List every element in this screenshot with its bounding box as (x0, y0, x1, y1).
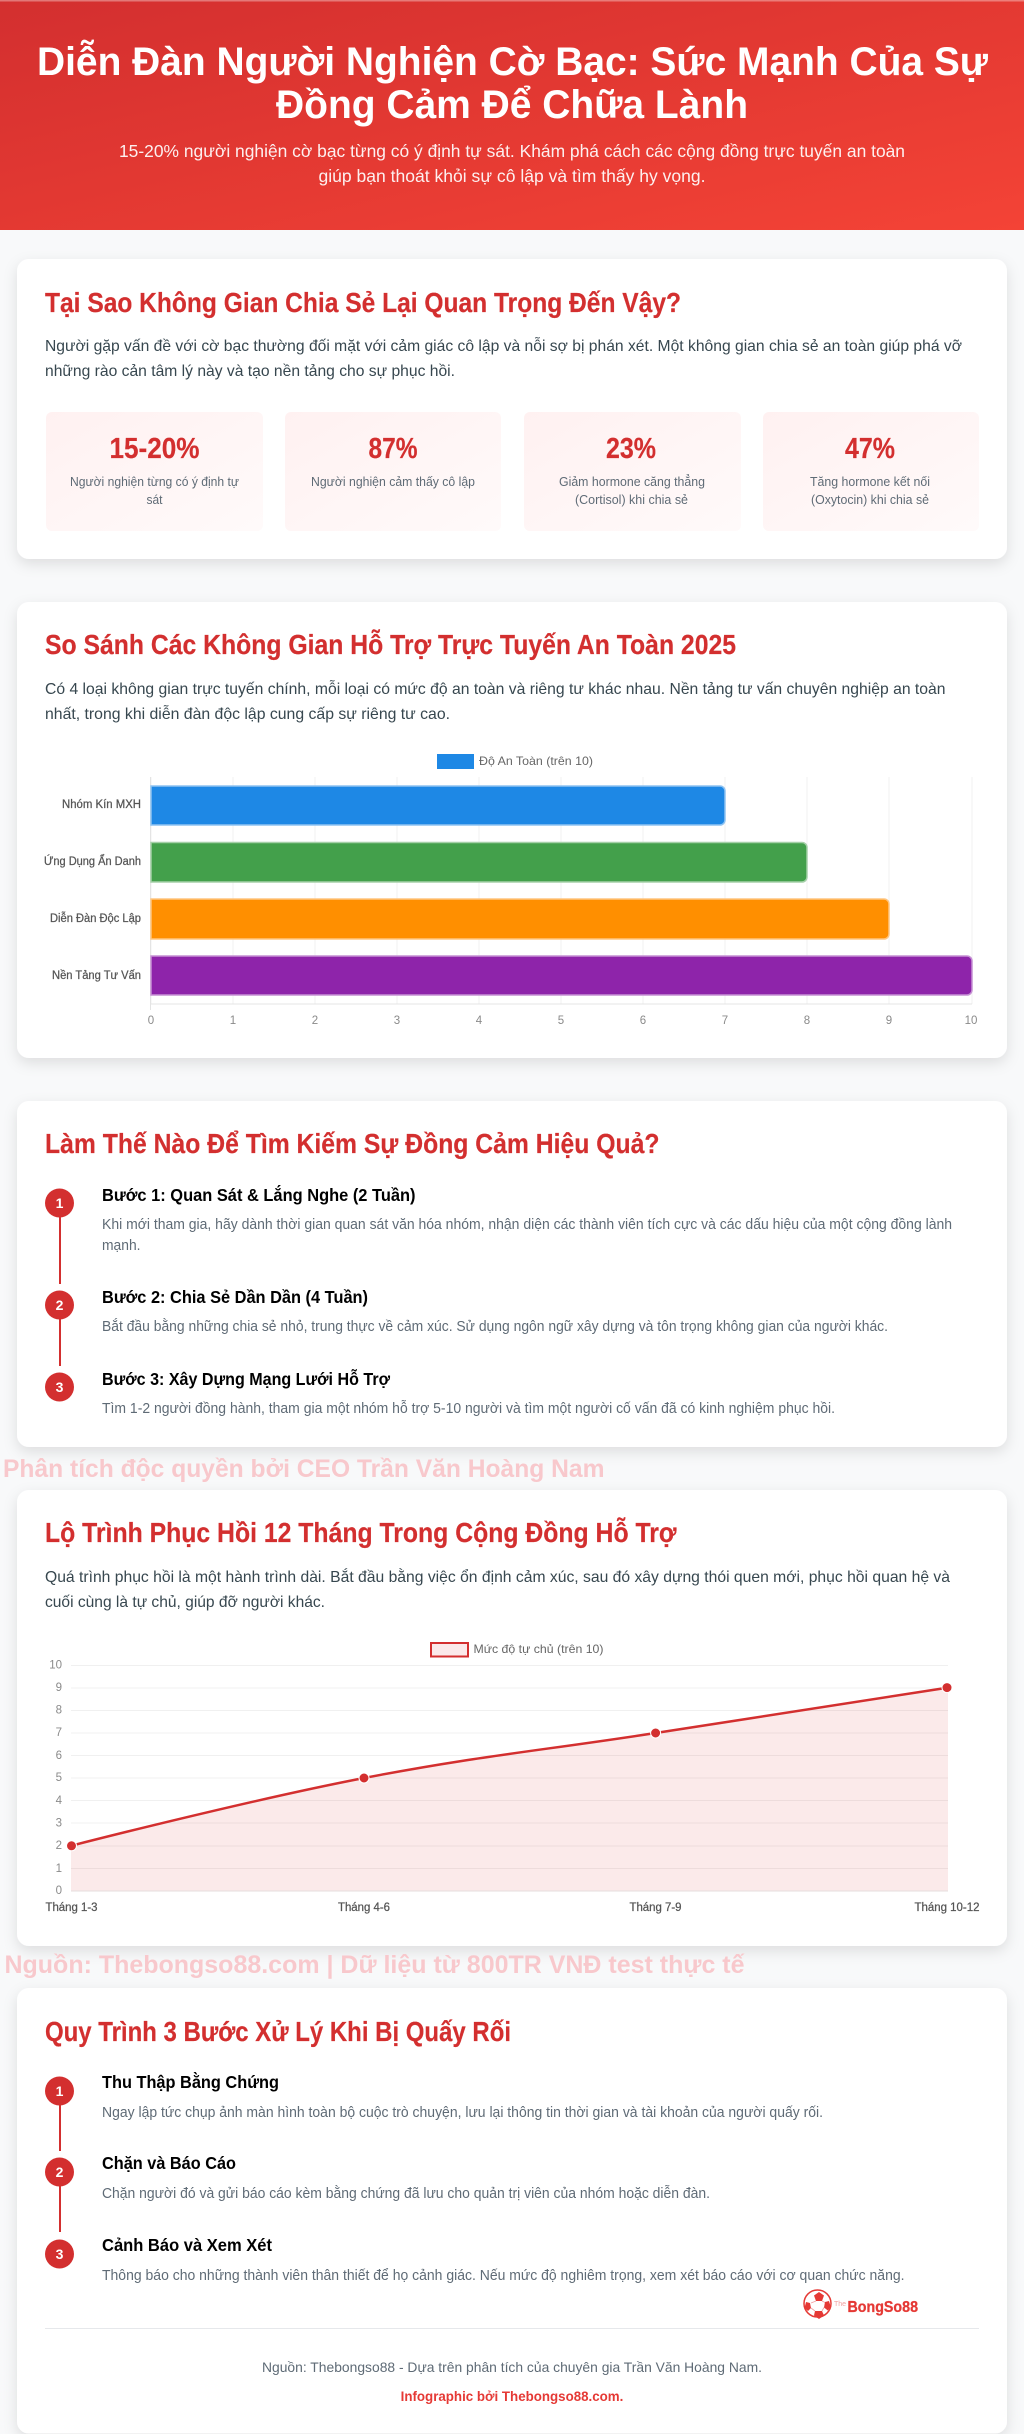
subtitle (119, 141, 905, 186)
stat card: 15-20% (46, 412, 263, 531)
step 2: Chặn và Báo Cáo (102, 2153, 236, 2173)
category labels: Nền Tảng Tư Vấn (52, 970, 141, 982)
y axis ticks: 8 (56, 1704, 62, 1716)
stat card: 47%: 47% (845, 433, 895, 465)
step 2: Chặn người đó và gửi báo cáo kèm bằng chứng đã lưu cho quản trị viên của nhóm hoặc diễn đàn. (102, 2185, 710, 2202)
x axis ticks: 3 (394, 1015, 400, 1027)
x axis labels: Tháng 4-6 (338, 1902, 390, 1914)
step 3: 3 (56, 2246, 64, 2262)
step 1: Thu Thập Bằng Chứng (102, 2071, 279, 2092)
intro text: Quá trình phục hồi là một hành trình dài. Bắt đầu bằng việc ổn định cảm xúc, sau đó xây dựng thói quen mới, phục hồi quan hệ và (45, 1567, 950, 1586)
x axis ticks: 2 (312, 1015, 318, 1027)
x axis labels (46, 1902, 980, 1914)
step 1: Bước 1: Quan Sát & Lắng Nghe (2 Tuần) (102, 1184, 416, 1205)
x axis labels: Tháng 7-9 (630, 1902, 682, 1914)
intro text (45, 1567, 950, 1611)
legend: Độ An Toàn (trên 10) (479, 754, 593, 768)
icon: soccer ball (804, 2290, 831, 2319)
step 1: mạnh. (102, 1238, 140, 1254)
intro text: Có 4 loại không gian trực tuyến chính, mỗi loại có mức độ an toàn và riêng tư khác nhau. Nền tảng tư vấn chuyên nghiệp an toàn (45, 679, 946, 698)
x axis ticks: 0 (148, 1015, 154, 1027)
step 3: 3 (56, 1379, 64, 1395)
stat card: 47%: (Oxytocin) khi chia sẻ (811, 492, 929, 507)
bar: Diễn Đàn Độc Lập (151, 899, 889, 939)
category labels: Nhóm Kín MXH (62, 799, 141, 811)
category labels (44, 799, 141, 982)
y axis ticks: 2 (56, 1840, 62, 1852)
legend: Mức độ tự chủ (trên 10) (474, 1642, 604, 1656)
subtitle: giúp bạn thoát khỏi sự cô lập và tìm thấy hy vọng. (318, 166, 706, 186)
bar chart (44, 754, 977, 1027)
stat card: 87%: 87% (368, 433, 418, 465)
step 3: Cảnh Báo và Xem Xét (102, 2235, 272, 2255)
y axis ticks: 6 (56, 1750, 62, 1762)
x axis ticks (148, 1015, 977, 1027)
connector lines (59, 2105, 61, 2232)
step 3: Tìm 1-2 người đồng hành, tham gia một nhóm hỗ trợ 5-10 người và tìm một người cố vấn đã có kinh nghiệm phục hồi. (102, 1400, 835, 1417)
stat card: 87%: Người nghiện cảm thấy cô lập (311, 474, 475, 489)
y axis ticks: 0 (56, 1885, 62, 1897)
intro text (45, 679, 946, 723)
step 2 (45, 2153, 710, 2202)
x axis ticks: 5 (558, 1015, 564, 1027)
y axis ticks (49, 1660, 63, 1897)
x axis ticks: 4 (476, 1015, 483, 1027)
y axis ticks: 7 (56, 1727, 62, 1739)
bar: Nhóm Kín MXH (151, 786, 725, 825)
category labels: Ứng Dụng Ẩn Danh (44, 855, 141, 868)
stat card: 15-20%: 15-20% (110, 433, 200, 465)
step 3: Bước 3: Xây Dựng Mạng Lưới Hỗ Trợ (102, 1368, 390, 1389)
footer source: Nguồn: Thebongso88 - Dựa trên phân tích của chuyên gia Trần Văn Hoàng Nam. (262, 2359, 762, 2375)
intro text: cuối cùng là tự chủ, giúp đỡ người khác. (45, 1594, 325, 1611)
heading: So Sánh Các Không Gian Hỗ Trợ Trực Tuyến An Toàn 2025 (45, 629, 736, 660)
trend line (71, 1688, 948, 1846)
heading: Quy Trình 3 Bước Xử Lý Khi Bị Quấy Rối (45, 2016, 511, 2047)
stat card: 23%: (Cortisol) khi chia sẻ (575, 492, 688, 507)
header banner (0, 0, 1024, 230)
stat card: 47%: Tăng hormone kết nối (810, 474, 930, 489)
panel: safe spaces comparison (17, 602, 1007, 1058)
stat card: 87% (285, 412, 501, 531)
intro text: Người gặp vấn đề với cờ bạc thường đối mặt với cảm giác cô lập và nỗi sợ bị phán xét. Một không gian chia sẻ an toàn giúp phá vỡ (45, 336, 962, 355)
step 3: Thông báo cho những thành viên thân thiết để họ cảnh giác. Nếu mức độ nghiêm trọng, xem xét báo cáo với cơ quan chức năng. (102, 2268, 904, 2284)
y axis ticks: 9 (56, 1682, 62, 1694)
step 2: 2 (56, 1297, 64, 1313)
y axis ticks: 4 (56, 1795, 63, 1807)
step 2 (45, 1287, 888, 1335)
watermark: source: Nguồn: Thebongso88.com | Dữ liệu từ 800TR VNĐ test thực tế (4, 1951, 745, 1979)
stat card: 23%: 23% (606, 433, 656, 465)
title (37, 38, 988, 127)
bar: Nền Tảng Tư Vấn (151, 956, 972, 995)
x axis ticks: 10 (965, 1015, 977, 1027)
title: Diễn Đàn Người Nghiện Cờ Bạc: Sức Mạnh Của Sự (37, 38, 988, 84)
x axis ticks: 8 (804, 1015, 810, 1027)
step 3 (45, 2235, 904, 2284)
logo: TheBongSo88 (804, 2290, 918, 2319)
y axis ticks: 10 (49, 1660, 62, 1672)
panel: harassment process (17, 1988, 1007, 2434)
y axis ticks: 3 (56, 1818, 62, 1830)
logo: TheBongSo88: BongSo88 (848, 2299, 918, 2316)
intro text (45, 336, 962, 380)
step 2: Bắt đầu bằng những chia sẻ nhỏ, trung thực về cảm xúc. Sử dụng ngôn ngữ xây dựng và tôn trọng không gian của người khác. (102, 1318, 888, 1335)
category labels: Diễn Đàn Độc Lập (50, 912, 141, 925)
stat card: 15-20%: sát (146, 492, 163, 507)
intro text: nhất, trong khi diễn đàn độc lập cung cấp sự riêng tư cao. (45, 704, 450, 723)
x axis ticks: 7 (722, 1015, 728, 1027)
connector lines (59, 1217, 61, 1366)
step 1 (45, 1184, 952, 1254)
x axis ticks: 1 (230, 1015, 236, 1027)
step 2: Bước 2: Chia Sẻ Dần Dần (4 Tuần) (102, 1287, 368, 1307)
stat card: 47% (763, 412, 979, 531)
title: Đồng Cảm Để Chữa Lành (276, 83, 748, 127)
panel: 12-month recovery roadmap (17, 1490, 1007, 1946)
footer credit: Infographic bởi Thebongso88.com. (401, 2388, 623, 2404)
panel: finding empathy (17, 1101, 1007, 1447)
x axis labels: Tháng 10-12 (914, 1902, 980, 1914)
panel: why sharing matters (17, 259, 1007, 559)
step 1: Ngay lập tức chụp ảnh màn hình toàn bộ cuộc trò chuyện, lưu lại thông tin thời gian và tài khoản của người quấy rối. (102, 2105, 823, 2121)
stat card: 15-20%: Người nghiện từng có ý định tự (70, 474, 239, 489)
logo: TheBongSo88: The (834, 2301, 846, 2308)
stat card: 23%: Giảm hormone căng thẳng (559, 474, 705, 489)
stat card: 23% (524, 412, 741, 531)
watermark: CEO analysis: Phân tích độc quyền bởi CEO Trần Văn Hoàng Nam (3, 1455, 604, 1483)
y axis ticks: 1 (56, 1863, 62, 1875)
heading: Lộ Trình Phục Hồi 12 Tháng Trong Cộng Đồng Hỗ Trợ (45, 1517, 677, 1548)
data points (66, 1683, 952, 1851)
step 3 (45, 1368, 835, 1417)
step 1: 1 (56, 1195, 64, 1211)
heading: Tại Sao Không Gian Chia Sẻ Lại Quan Trọng Đến Vậy? (45, 287, 681, 318)
bar: Ứng Dụng Ẩn Danh (151, 842, 807, 882)
intro text: những rào cản tâm lý này và tạo nền tảng cho sự phục hồi. (45, 363, 455, 380)
x axis ticks: 6 (640, 1015, 646, 1027)
x axis ticks: 9 (886, 1015, 892, 1027)
y axis ticks: 5 (56, 1772, 62, 1784)
step 1 (45, 2071, 823, 2121)
area fill (71, 1688, 948, 1891)
legend (437, 754, 593, 769)
x axis labels: Tháng 1-3 (46, 1902, 98, 1914)
step 1: Khi mới tham gia, hãy dành thời gian quan sát văn hóa nhóm, nhận diện các thành viên tích cực và các dấu hiệu của một cộng đồng lành (102, 1217, 952, 1233)
subtitle: 15-20% người nghiện cờ bạc từng có ý định tự sát. Khám phá cách các cộng đồng trực tuyến an toàn (119, 141, 905, 161)
step 2: 2 (56, 2164, 64, 2180)
line chart (46, 1642, 980, 1914)
step 1: 1 (56, 2083, 64, 2099)
heading: Làm Thế Nào Để Tìm Kiếm Sự Đồng Cảm Hiệu Quả? (45, 1128, 660, 1159)
